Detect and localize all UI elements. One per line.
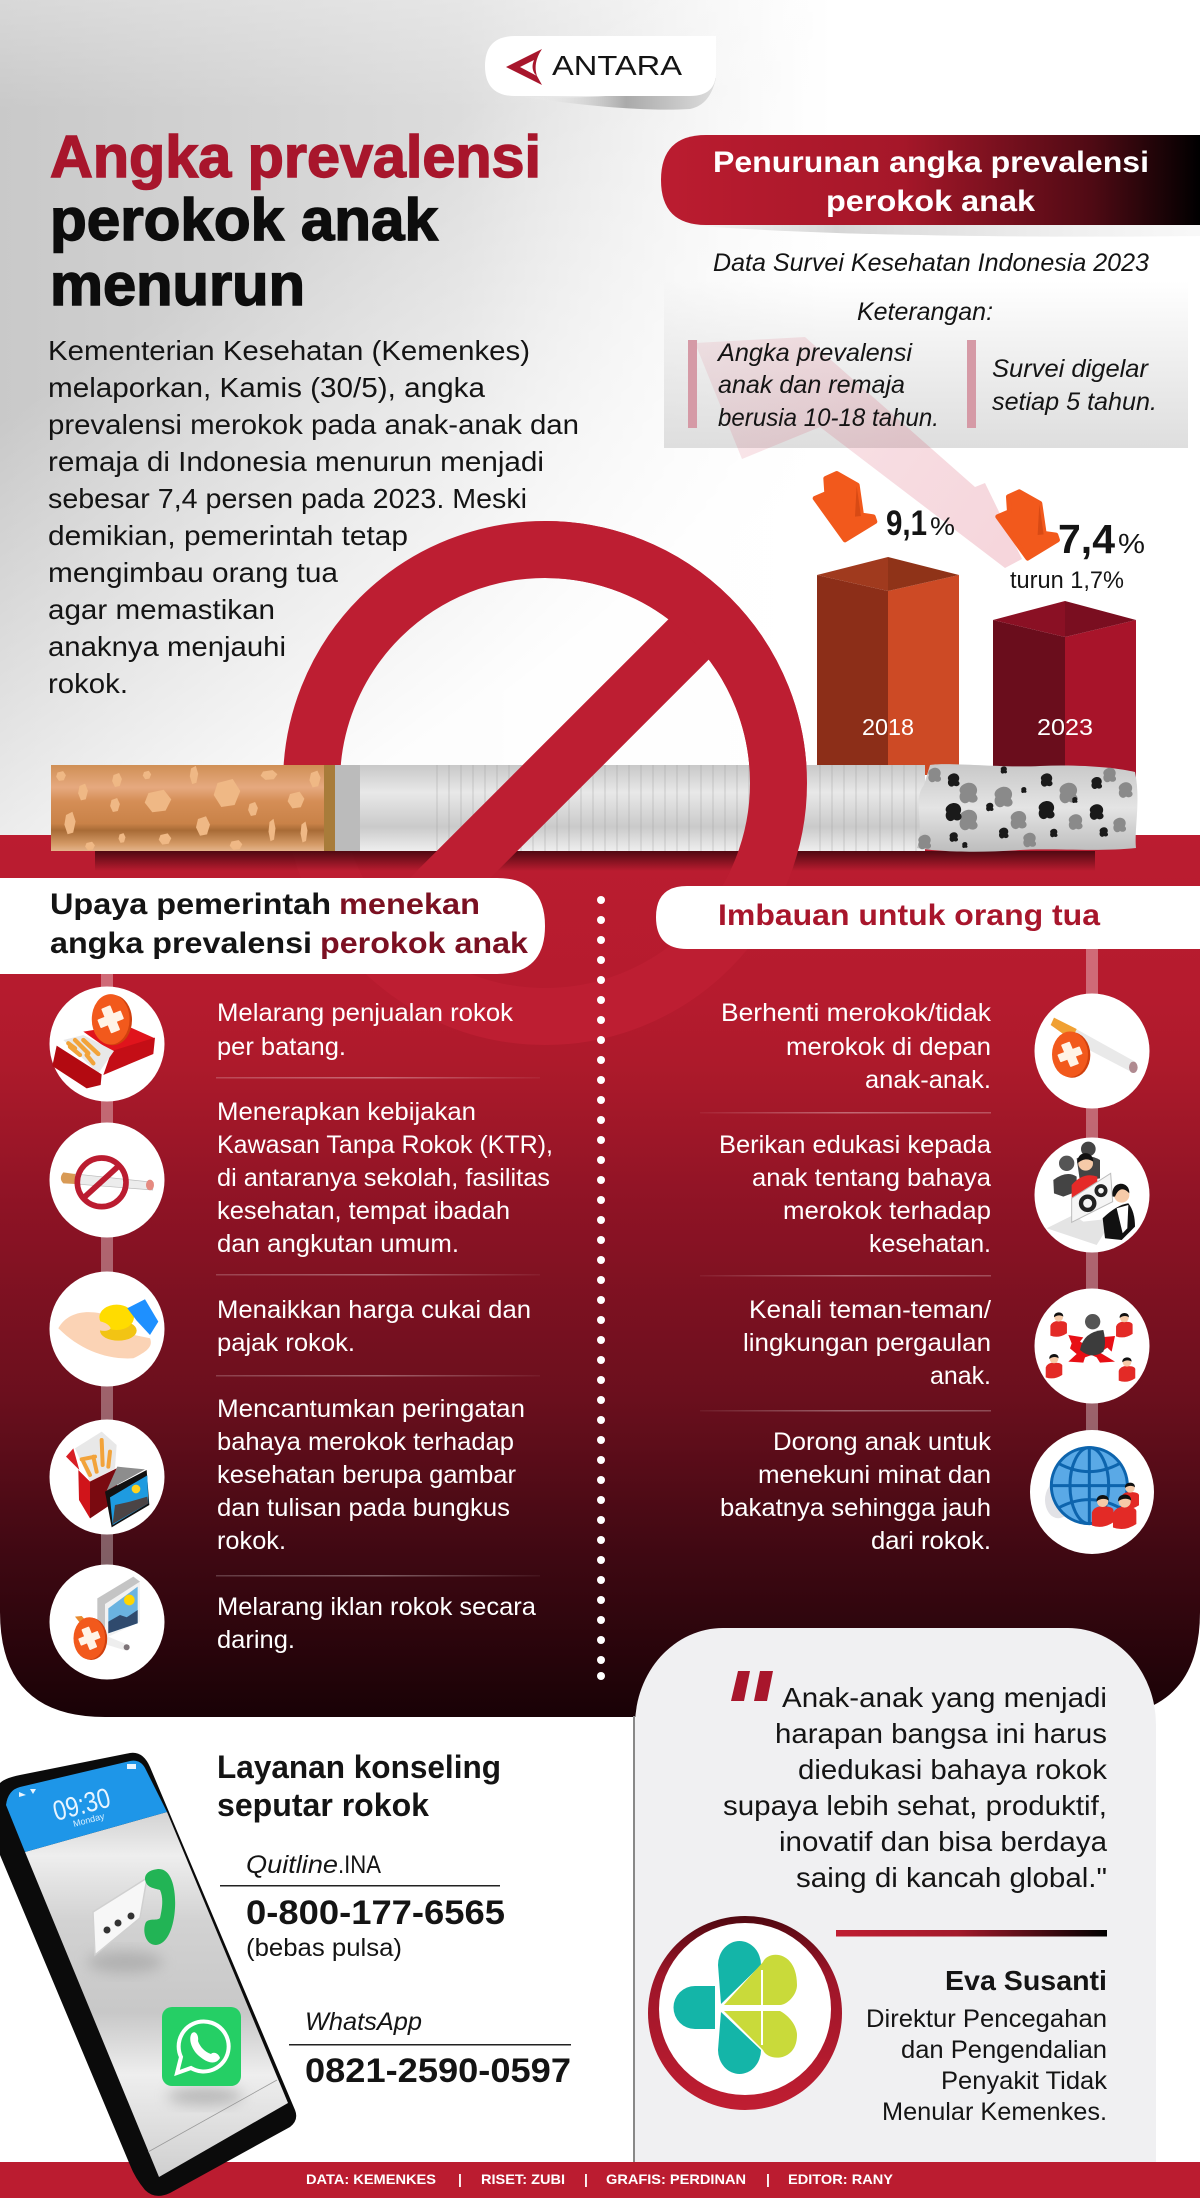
quote text: supaya lebih sehat, produktif, <box>723 1790 1107 1821</box>
phone lock screen <box>6 1761 167 1852</box>
intro paragraph <box>48 335 579 699</box>
text: encourage talents: dari rokok. <box>871 1527 991 1555</box>
speaker name and title <box>866 1965 1108 2126</box>
Quitline contact: 0-800-177-6565 <box>246 1894 505 1932</box>
panel: government efforts heading <box>0 878 545 974</box>
Quitline contact: .INA <box>338 1851 381 1879</box>
phone lock screen: Monday <box>72 1811 106 1829</box>
text: ban online ads: Melarang iklan rokok secara <box>217 1593 536 1621</box>
text: encourage talents: menekuni minat dan <box>758 1461 991 1489</box>
phone lock screen: 09:30 <box>50 1782 114 1827</box>
text: smoke free area <box>217 1098 553 1258</box>
text: ban online ads: daring. <box>217 1626 295 1654</box>
value 9,1%: 9,1 <box>886 504 927 543</box>
panel: government efforts heading: menekan <box>339 888 480 921</box>
text: warning on packs: dan tulisan pada bungkus <box>217 1494 510 1522</box>
legend box <box>664 281 1188 448</box>
counseling service heading: Layanan konseling <box>217 1749 501 1785</box>
WhatsApp contact: 0821-2590-0597 <box>305 2052 571 2090</box>
Quitline contact <box>220 1851 505 1962</box>
text: smoke free area: Kawasan Tanpa Rokok (KTR), <box>217 1131 553 1159</box>
icon: orange down arrow 2018 <box>815 473 875 540</box>
header text: Penurunan angka prevalensi <box>713 146 1149 179</box>
panel: survey header and legend <box>661 135 1200 448</box>
icon: education group <box>1034 1138 1150 1252</box>
legend text: setiap 5 tahun. <box>992 388 1157 416</box>
quote text: saing di kancah global." <box>796 1862 1107 1893</box>
text: encourage talents <box>720 1428 992 1555</box>
text: smoke free area: dan angkutan umum. <box>217 1230 459 1258</box>
speaker name and title: Eva Susanti <box>945 1965 1107 1996</box>
ash tip <box>917 764 1137 852</box>
text: warning on packs <box>217 1395 525 1555</box>
text: warning on packs: rokok. <box>217 1527 286 1555</box>
text: raise excise and tax <box>217 1296 531 1357</box>
legend text: berusia 10-18 tahun. <box>718 404 939 432</box>
survey source: Data Survei Kesehatan Indonesia 2023 <box>713 249 1149 277</box>
icon: chat and handset <box>87 1869 175 1973</box>
title <box>50 124 541 318</box>
footer credits: | <box>458 2171 462 2187</box>
intro paragraph: sebesar 7,4 persen pada 2023. Meski <box>48 483 527 514</box>
text: stop smoking: Berhenti merokok/tidak <box>721 999 992 1027</box>
icon: pack with warning picture <box>50 1420 164 1534</box>
footer credits: | <box>766 2171 770 2187</box>
intro paragraph: rokok. <box>48 668 128 699</box>
icon: banned cigarette pack <box>50 986 164 1102</box>
icon: cigarette with cross <box>1034 994 1150 1108</box>
text: stop smoking: merokok di depan <box>786 1033 991 1061</box>
footer credits: EDITOR: RANY <box>788 2171 894 2187</box>
text: raise excise and tax: pajak rokok. <box>217 1329 355 1357</box>
panel: government efforts heading: perokok anak <box>320 927 528 960</box>
title: menurun <box>50 252 305 318</box>
phone illustration <box>0 1753 296 2196</box>
text: educate children: kesehatan. <box>869 1230 991 1258</box>
text: know friends: anak. <box>930 1362 991 1390</box>
logo: ANTARA <box>485 36 716 110</box>
bar 2018: 2018 <box>862 714 914 740</box>
bar 2018 <box>817 557 959 775</box>
panel: parent advice heading <box>656 886 1200 949</box>
text: warning on packs: bahaya merokok terhadap <box>217 1428 514 1456</box>
logo: ANTARA: ANTARA <box>552 50 682 81</box>
label: turun 1,7%: turun 1,7% <box>1010 567 1124 594</box>
footer credits: GRAFIS: PERDINAN <box>606 2171 746 2187</box>
text: ban single stick sales <box>217 999 514 1061</box>
title: perokok anak <box>50 187 438 253</box>
bar 2023 <box>993 601 1136 780</box>
text: educate children: merokok terhadap <box>783 1197 991 1225</box>
panel: government efforts list <box>50 974 553 1680</box>
intro paragraph: remaja di Indonesia menurun menjadi <box>48 446 544 477</box>
header pill <box>661 135 1200 225</box>
intro paragraph: mengimbau orang tua <box>48 557 338 588</box>
legend text: Angka prevalensi <box>716 339 913 367</box>
speaker name and title: dan Pengendalian <box>901 2036 1107 2064</box>
bar 2023: 2023 <box>1037 714 1093 740</box>
footer credits: RISET: ZUBI <box>481 2171 565 2187</box>
text: educate children <box>719 1131 991 1258</box>
Quitline contact: Quitline <box>246 1851 338 1879</box>
text: educate children: anak tentang bahaya <box>752 1164 991 1192</box>
legend text: anak dan remaja <box>718 371 905 399</box>
text: know friends: Kenali teman-teman/ <box>749 1296 991 1324</box>
panel: parent advice heading: Imbauan untuk orang tua <box>718 899 1100 932</box>
icon: WhatsApp <box>162 2007 243 2105</box>
title: Angka prevalensi <box>50 124 541 190</box>
cigarette illustration <box>51 764 1137 871</box>
icon: social circle <box>1034 1288 1150 1404</box>
panel: parent advice list <box>700 949 1154 1555</box>
paper <box>425 765 925 851</box>
icon: quotation mark <box>731 1671 773 1701</box>
quote text: harapan bangsa ini harus <box>775 1718 1107 1749</box>
arrow: declining trend <box>695 337 1022 568</box>
counseling service heading: seputar rokok <box>217 1787 429 1823</box>
text: stop smoking <box>721 999 992 1094</box>
panel: quote card <box>634 1628 1156 2162</box>
phone screen <box>25 1812 288 2177</box>
value 7,4% <box>1058 516 1145 562</box>
counseling service heading <box>217 1749 501 1823</box>
footer credits: DATA: KEMENKES <box>306 2171 436 2187</box>
icon: no smoking <box>50 1122 164 1238</box>
speaker name and title: Direktur Pencegahan <box>866 2005 1107 2033</box>
text: smoke free area: kesehatan, tempat ibadah <box>217 1197 510 1225</box>
text: ban single stick sales: per batang. <box>217 1033 346 1061</box>
icon: online advert ban <box>50 1564 164 1680</box>
legend text: Keterangan: <box>857 298 993 326</box>
quote text: Anak-anak yang menjadi <box>782 1682 1107 1713</box>
value 7,4%: % <box>1118 528 1145 559</box>
WhatsApp contact <box>289 2008 571 2090</box>
prohibition sign ring <box>312 550 778 1016</box>
intro paragraph: Kementerian Kesehatan (Kemenkes) <box>48 335 530 366</box>
Quitline contact: (bebas pulsa) <box>246 1934 402 1962</box>
text: know friends: lingkungan pergaulan <box>743 1329 991 1357</box>
intro paragraph: agar memastikan <box>48 594 275 625</box>
icon: globe with people <box>1030 1430 1154 1554</box>
quote text <box>723 1682 1108 1893</box>
quote text: diedukasi bahaya rokok <box>798 1754 1108 1785</box>
footer credits <box>0 2162 1200 2198</box>
panel: government efforts heading: Upaya pemerintah <box>50 888 331 921</box>
header text <box>713 146 1149 218</box>
text: smoke free area: Menerapkan kebijakan <box>217 1098 476 1126</box>
red main panel <box>0 835 1200 1717</box>
logo: Kemenkes <box>648 1916 842 2110</box>
cigarette shadow <box>95 851 1095 871</box>
text: encourage talents: bakatnya sehingga jauh <box>720 1494 991 1522</box>
filter <box>51 765 425 851</box>
text: ban single stick sales: Melarang penjualan rokok <box>217 999 514 1027</box>
text: smoke free area: di antaranya sekolah, fasilitas <box>217 1164 550 1192</box>
text: know friends <box>743 1296 991 1390</box>
speaker name and title: Menular Kemenkes. <box>882 2098 1107 2126</box>
icon: hand with coins <box>50 1272 164 1386</box>
header text: perokok anak <box>826 185 1035 218</box>
prohibition sign: diagonal bar and front arc <box>418 521 807 870</box>
value 9,1%: % <box>930 513 955 541</box>
panel: government efforts heading: angka prevalensi <box>50 927 312 960</box>
text: warning on packs: kesehatan berupa gambar <box>217 1461 516 1489</box>
legend text: Survei digelar <box>992 355 1150 383</box>
value 7,4%: 7,4 <box>1058 516 1115 562</box>
bar chart: prevalence 2018 and 2023 <box>815 473 1145 780</box>
icon: orange down arrow 2023 <box>998 492 1058 558</box>
WhatsApp contact: WhatsApp <box>305 2008 422 2036</box>
text: ban online ads <box>217 1593 536 1654</box>
quote text: inovatif dan bisa berdaya <box>779 1826 1107 1857</box>
legend text <box>688 298 1157 432</box>
text: warning on packs: Mencantumkan peringatan <box>217 1395 525 1423</box>
text: encourage talents: Dorong anak untuk <box>773 1428 992 1456</box>
intro paragraph: anaknya menjauhi <box>48 631 286 662</box>
intro paragraph: prevalensi merokok pada anak-anak dan <box>48 409 579 440</box>
intro paragraph: melaporkan, Kamis (30/5), angka <box>48 372 485 403</box>
intro paragraph: demikian, pemerintah tetap <box>48 520 408 551</box>
text: stop smoking: anak-anak. <box>865 1066 991 1094</box>
dotted column divider <box>597 896 605 1680</box>
text: raise excise and tax: Menaikkan harga cukai dan <box>217 1296 531 1324</box>
speaker name and title: Penyakit Tidak <box>941 2067 1108 2095</box>
footer credits: | <box>584 2171 588 2187</box>
text: educate children: Berikan edukasi kepada <box>719 1131 991 1159</box>
